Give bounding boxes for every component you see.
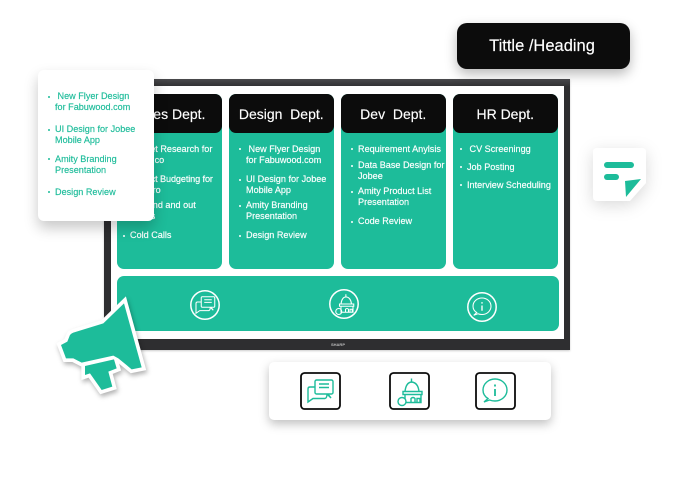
sales item 1: Market Research for: [130, 144, 212, 154]
hr item 3: Interview Scheduling: [467, 180, 551, 190]
sales item 4: Cold Calls: [130, 230, 171, 240]
popup card: flyer list: [38, 70, 154, 221]
dev heading: Dev Dept.: [360, 106, 426, 122]
icon tray: [269, 362, 551, 420]
popup item 1: for Fabuwood.com: [55, 102, 130, 112]
column: dev dept: [341, 94, 446, 269]
sales item 2: [130, 174, 213, 196]
icon: dome box: [389, 372, 430, 410]
design item 2: UI Design for Jobee: [246, 174, 326, 184]
title badge: Tittle /Heading: [489, 37, 595, 55]
design item 3: [246, 200, 308, 222]
popup item 1: [55, 91, 130, 113]
monitor screen: [111, 86, 564, 339]
popup item 3: Amity Branding: [55, 154, 117, 164]
icon band on screen: [117, 276, 559, 331]
dev item 3: Presentation: [358, 197, 409, 207]
popup item 2: [55, 124, 135, 146]
sales item 3: Calls: [135, 211, 155, 221]
column: hr dept: [453, 94, 558, 269]
icon: chat box: [300, 372, 341, 410]
design item 4: Design Review: [246, 230, 307, 240]
dev item 1: Requirement Anylsis: [358, 144, 441, 154]
design item 1: for Fabuwood.com: [246, 155, 321, 165]
monitor: [104, 79, 570, 350]
dev item 3: [358, 186, 431, 208]
design item 2: [246, 174, 326, 196]
popup item 3: [55, 154, 117, 176]
sales item 2: Wipro: [137, 185, 161, 195]
popup item 2: Mobile App: [55, 135, 100, 145]
popup item 1: New Flyer Design: [58, 91, 129, 101]
sales item 2: Project Budgeting for: [130, 174, 213, 184]
popup item 3: Presentation: [55, 164, 106, 174]
design item 1: New Flyer Design: [249, 144, 320, 154]
icon: chat on band: [190, 290, 220, 320]
popup item 2: UI Design for Jobee: [55, 124, 135, 134]
dev item 4: Code Review: [358, 216, 412, 226]
dev heading: [341, 94, 446, 133]
hr item 1: CV Screeningg: [470, 144, 531, 154]
design item 3: Amity Branding: [246, 200, 308, 210]
design heading: [229, 94, 334, 133]
design item 3: Presentation: [246, 211, 297, 221]
icon: dome on band: [329, 289, 359, 319]
column: sales dept: [117, 94, 222, 269]
icon: info on band: [467, 292, 497, 322]
sales item 1: Amity.co: [130, 155, 164, 165]
design heading: Design Dept.: [239, 106, 324, 122]
design item 2: Mobile App: [246, 185, 291, 195]
sales heading: Sales Dept.: [133, 106, 205, 122]
brand label: SHARP: [331, 342, 345, 347]
icon: info box: [475, 372, 516, 410]
popup item 4: Design Review: [55, 186, 116, 196]
design item 1: [246, 144, 321, 166]
sales item 3: Inbound and out: [130, 200, 196, 210]
hr heading: HR Dept.: [476, 106, 534, 122]
sales heading: [117, 94, 222, 133]
hr heading: [453, 94, 558, 133]
dev item 2: Data Base Design for: [358, 160, 444, 170]
sales item 3: [130, 200, 196, 222]
dev item 2: [358, 160, 444, 182]
sales item 1: [130, 144, 212, 166]
title badge: [457, 23, 630, 69]
column: design dept: [229, 94, 334, 269]
hr item 2: Job Posting: [467, 162, 515, 172]
dev item 3: Amity Product List: [358, 186, 431, 196]
dev item 2: Jobee: [358, 171, 383, 181]
